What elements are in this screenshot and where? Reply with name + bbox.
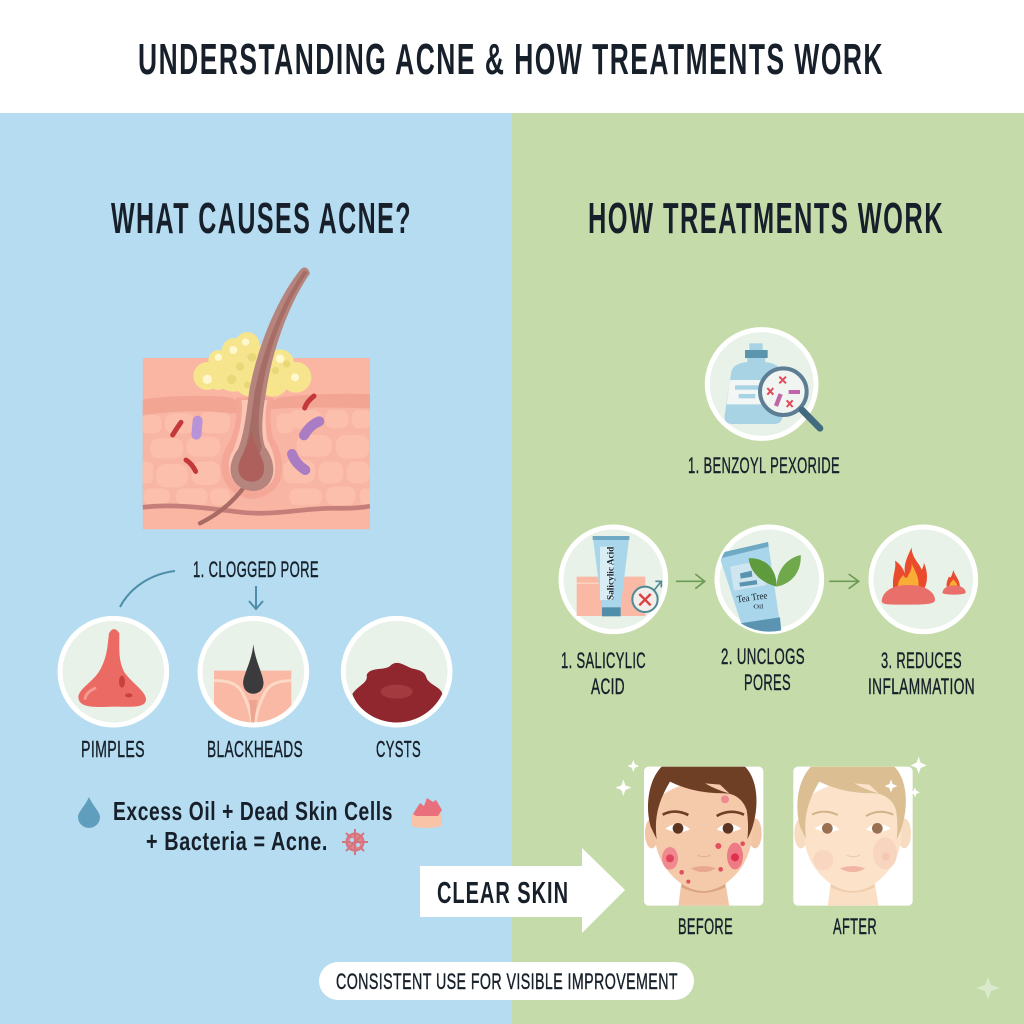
label: blackheads: BLACKHEADS (207, 736, 303, 762)
label: unclogs pores (721, 644, 805, 695)
portrait: before (644, 767, 763, 907)
text: equation line 1: Excess Oil + Dead Skin Cells (113, 796, 393, 826)
arrow: step two to three (829, 574, 859, 589)
icon: bacterium (342, 829, 368, 855)
label: unclogs pores: PORES (744, 670, 791, 695)
heading: what causes acne: WHAT CAUSES ACNE? (111, 194, 412, 243)
sub-element: hair (200, 267, 310, 523)
panel: causes background (0, 113, 512, 1024)
icon: dead skin cells (411, 798, 442, 828)
icon: blackhead ring (200, 618, 307, 725)
illustration: skin cross-section with clogged follicle (140, 267, 372, 529)
arrow: clear skin: CLEAR SKIN (437, 875, 569, 910)
label: reduces inflammation: 3. REDUCES (881, 648, 962, 673)
icon: cyst (343, 618, 450, 725)
label: before: BEFORE (678, 914, 733, 939)
label: reduces inflammation (868, 648, 975, 699)
icons: acne types (60, 618, 450, 725)
portrait: after (793, 767, 913, 907)
label: benzoyl peroxide: 1. BENZOYL PEXORIDE (688, 453, 840, 478)
callout: consistent use (319, 962, 694, 1000)
header band (0, 0, 1024, 113)
label: salicylic acid (561, 648, 646, 699)
sparkles (615, 757, 927, 797)
sub-element: sebum plug (193, 332, 311, 397)
text: equation line 2: + Bacteria = Acne. (146, 826, 328, 856)
label: cysts: CYSTS (376, 736, 421, 762)
icon: salicylic acid tube: Salicylic Acid (605, 547, 615, 600)
arrow: clear skin (420, 848, 625, 933)
decorative sparkle (976, 977, 1000, 1000)
label: clogged pore: 1. CLOGGED PORE (193, 557, 319, 582)
icon: pimple (60, 618, 167, 725)
equation text with icons (78, 796, 442, 856)
label: salicylic acid: 1. SALICYLIC (561, 648, 646, 673)
panel: treatments background (512, 113, 1024, 1024)
label: unclogs pores: 2. UNCLOGS (721, 644, 805, 669)
icon: blackhead (200, 618, 307, 725)
label: salicylic acid: ACID (591, 674, 625, 699)
icon: tea tree tube: Oil (753, 604, 764, 610)
icon: inflammation flames (871, 527, 976, 632)
icon: oil drop (78, 797, 100, 828)
label: after: AFTER (833, 914, 877, 939)
arrow: to blackheads (249, 586, 263, 609)
sub-element: follicle sheath (221, 397, 282, 499)
arrow: step one to two (676, 574, 705, 589)
before and after portraits (615, 757, 927, 907)
connector: curve to pimples (120, 571, 175, 607)
icon: tea tree tube (717, 527, 822, 635)
label: pimples: PIMPLES (81, 736, 145, 762)
sub-element: bacteria (173, 396, 319, 471)
callout: consistent use: CONSISTENT USE FOR VISIBLE IMPROVEMENT (336, 969, 678, 994)
treatment step icons (561, 527, 976, 635)
icon: salicylic acid tube (561, 527, 666, 632)
icon: tea tree tube: Tea Tree (736, 590, 769, 606)
icon: benzoyl peroxide bottle with magnifier (707, 330, 820, 438)
